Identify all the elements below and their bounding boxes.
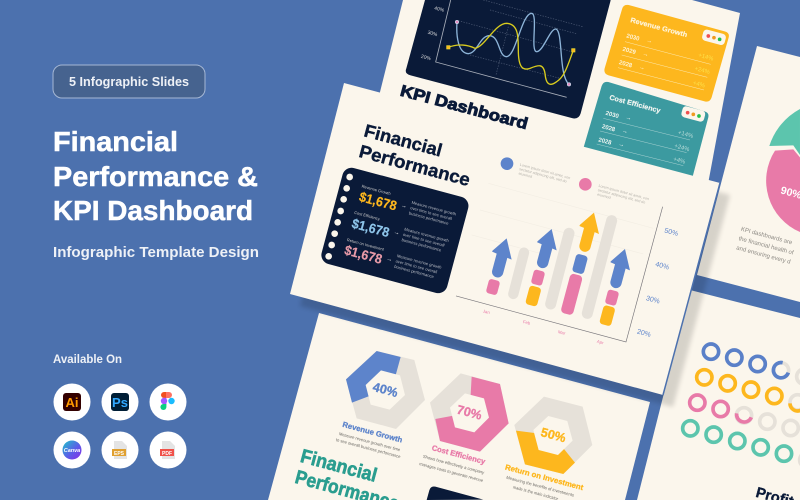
navy metrics panel xyxy=(319,166,471,295)
metric: cost efficiency: business performance xyxy=(401,237,443,253)
card: revenue growth: +14% xyxy=(697,53,715,63)
card: cost efficiency: +24% xyxy=(673,143,691,153)
metric: revenue growth: → xyxy=(400,203,407,210)
bar chart xyxy=(456,183,679,346)
line chart panel xyxy=(406,0,611,118)
legend: Lorem ipsum dolor sit amet, con xyxy=(598,184,649,201)
bar chart: Feb xyxy=(522,319,531,326)
card: revenue growth: +4% xyxy=(692,80,706,90)
metric: cost efficiency: $1,678 xyxy=(350,216,391,240)
heading: financial performance teal xyxy=(293,446,401,500)
line chart panel: 20% xyxy=(420,54,432,62)
subtitle: Infographic Template Design xyxy=(53,245,259,261)
bar chart: 30% xyxy=(645,295,660,306)
icon: illustrator xyxy=(54,384,90,420)
label: revenue growth: to see overall business performance xyxy=(335,437,402,459)
metric: revenue growth: business performance xyxy=(408,210,450,226)
panel: profit rings slide xyxy=(637,290,800,500)
icon: pdf file: PDF xyxy=(162,451,172,457)
label: cost efficiency: Shows how effectively a company xyxy=(422,454,486,475)
body text xyxy=(735,227,794,266)
metric: revenue growth: Revenue Growth xyxy=(361,183,391,196)
bar chart: 20% xyxy=(636,328,651,339)
pie chart xyxy=(766,109,800,232)
card: cost efficiency: 2030 xyxy=(605,111,620,120)
icon: eps file xyxy=(102,432,138,468)
heading: financial performance xyxy=(357,121,472,190)
icon: canva: Canva xyxy=(64,448,80,454)
metric: return on investment: $1,678 xyxy=(343,242,384,267)
card: cost efficiency: 2028 xyxy=(597,137,613,147)
card: revenue growth: → xyxy=(638,64,645,72)
card: cost efficiency: Cost Efficiency xyxy=(608,94,661,115)
card: cost efficiency: +14% xyxy=(677,130,694,140)
body text: KPI dashboards are xyxy=(740,227,793,246)
metric: return on investment: → xyxy=(385,256,393,263)
card: revenue growth: Revenue Growth xyxy=(629,17,688,39)
bar chart: Apr xyxy=(596,339,605,346)
icon: figma xyxy=(150,384,186,420)
icon: pdf file xyxy=(150,432,186,468)
hexagon: return on investment xyxy=(514,397,592,474)
metric: return on investment: over time to see overall xyxy=(395,258,438,274)
body text: the financial health of xyxy=(738,236,794,257)
card: revenue growth: 2030 xyxy=(625,33,641,43)
card: cost efficiency: → xyxy=(621,128,628,135)
badge: 5 infographic slides: 5 Infographic Slides xyxy=(69,75,189,89)
metric: revenue growth: $1,678 xyxy=(358,189,398,213)
icon: photoshop xyxy=(102,384,138,420)
metric: cost efficiency: over time to see overall xyxy=(402,232,445,248)
label: return on investment: Return on Investment xyxy=(504,463,585,492)
title: Financial xyxy=(53,126,178,157)
body text: and ensuring every d xyxy=(735,245,791,266)
label: revenue growth: Measure revenue growth over time xyxy=(338,431,401,452)
panel: main financial performance slide xyxy=(290,83,720,395)
card: revenue growth: +24% xyxy=(694,66,711,76)
hexagon: return on investment: 50% xyxy=(539,425,567,445)
icon: canva xyxy=(54,432,90,468)
metric: cost efficiency: → xyxy=(393,229,400,237)
panel: right pie slide xyxy=(697,46,800,302)
card: cost efficiency: +4% xyxy=(672,157,686,166)
card: cost efficiency: 2028 xyxy=(601,124,616,134)
metric: revenue growth: Measure revenue growth xyxy=(411,200,457,217)
hexagon: revenue growth xyxy=(346,351,425,429)
hexagon: cost efficiency xyxy=(430,373,509,452)
heading: financial performance: Financial xyxy=(362,121,444,161)
title: Performance & xyxy=(53,161,258,192)
icon: eps file: EPS xyxy=(114,451,125,457)
navy callout xyxy=(427,486,483,500)
icon: photoshop: Ps xyxy=(112,395,128,410)
bar chart: 50% xyxy=(663,227,679,238)
card: revenue growth: 2028 xyxy=(618,60,633,70)
legend xyxy=(501,157,649,205)
metric: cost efficiency: Cost Efficiency xyxy=(354,210,380,221)
line chart panel: 30% xyxy=(427,30,439,38)
heading: financial performance: Performance xyxy=(357,141,472,190)
legend: Lorem ipsum dolor sit amet, con xyxy=(519,163,571,180)
card: cost efficiency: → xyxy=(617,141,625,149)
card: revenue growth: 2029 xyxy=(622,47,637,56)
label: revenue growth xyxy=(336,422,402,458)
line chart panel: 40% xyxy=(433,5,445,14)
metric: revenue growth: over time to see overall xyxy=(410,205,453,221)
card: revenue growth xyxy=(604,5,729,102)
icon: illustrator: Ai xyxy=(66,395,78,410)
legend: eiusmod xyxy=(518,171,532,179)
ring grid xyxy=(683,344,800,468)
label: cost efficiency: Cost Efficiency xyxy=(431,443,487,466)
label: cost efficiency xyxy=(419,443,487,483)
card: cost efficiency xyxy=(583,82,708,177)
panel: bottom hexagon slide xyxy=(268,313,650,500)
metric: revenue growth xyxy=(358,183,457,226)
card: cost efficiency: → xyxy=(625,115,632,122)
bar chart: Mar xyxy=(557,329,566,336)
badge: 5 infographic slides xyxy=(53,65,205,98)
hexagon: cost efficiency: 70% xyxy=(455,403,483,423)
available on label: Available On xyxy=(53,354,122,366)
metric: cost efficiency: Measure revenue growth xyxy=(404,226,450,243)
legend: eiusmod xyxy=(597,192,611,200)
metric: return on investment: Return on Investment xyxy=(346,237,385,252)
main slide shadow xyxy=(300,95,730,407)
title xyxy=(53,126,258,226)
title: KPI Dashboard xyxy=(53,195,253,226)
heading: financial performance teal: Financial xyxy=(298,446,379,487)
hexagon: revenue growth: 40% xyxy=(371,380,399,400)
bar chart: Jan xyxy=(482,308,491,315)
metric: return on investment: Measure revenue growth xyxy=(396,253,443,270)
heading: KPI dashboard: KPI Dashboard xyxy=(398,83,530,133)
metric: return on investment: business performance xyxy=(394,264,435,279)
legend: sectetur adipiscing elit, sed do xyxy=(597,188,646,205)
metric: return on investment xyxy=(343,237,443,279)
label: revenue growth: Revenue Growth xyxy=(341,420,404,445)
card: revenue growth: → xyxy=(645,38,653,45)
card: revenue growth: → xyxy=(642,51,649,58)
metric: cost efficiency xyxy=(350,210,450,253)
label: cost efficiency: manages costs to generate revenue xyxy=(419,461,484,483)
bar chart: 40% xyxy=(654,261,670,272)
legend: sectetur adipiscing elit, sed do xyxy=(519,167,567,184)
panel: top KPI dashboard slide xyxy=(380,0,740,180)
label: return on investment: Measuring the benefits of investments xyxy=(506,475,575,498)
